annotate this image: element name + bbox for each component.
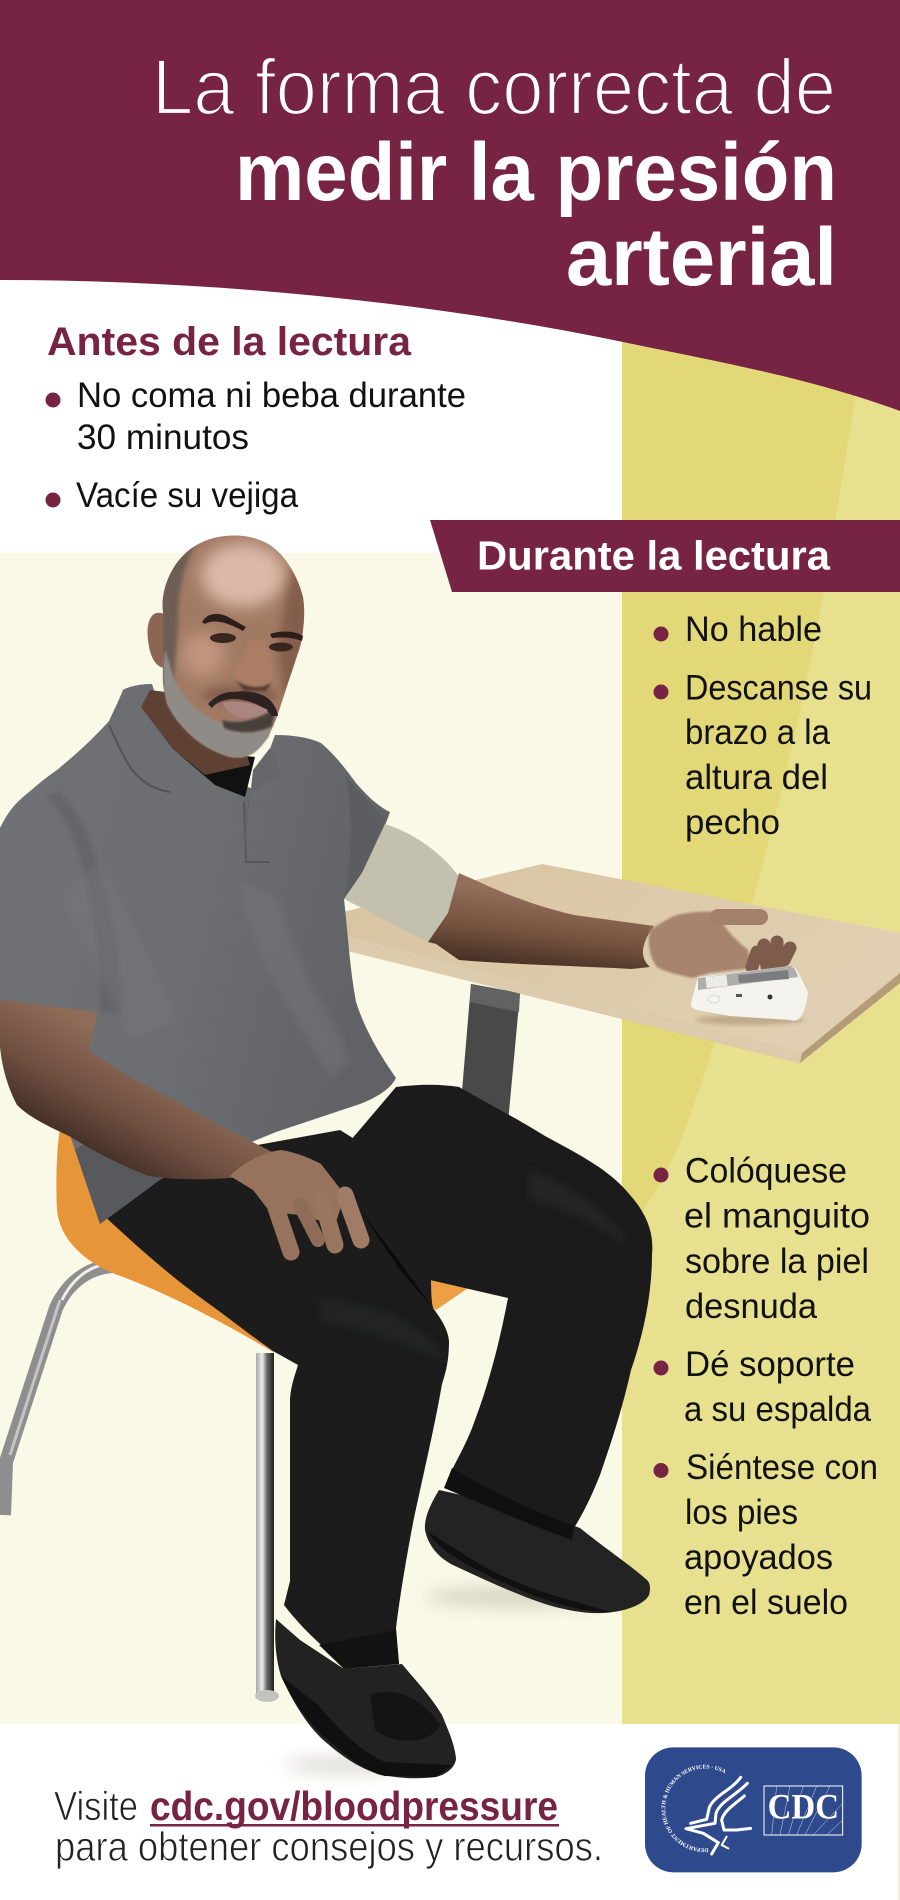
band: durante la lectura: Durante la lectura	[477, 532, 831, 578]
panel: durante la lectura list top: No hable	[685, 610, 822, 649]
monitor	[691, 966, 808, 1025]
panel: durante la lectura list top: brazo a la	[685, 713, 830, 752]
panel: durante la lectura list top: Descanse su	[685, 668, 872, 708]
skull and face	[163, 536, 304, 758]
head	[148, 536, 310, 758]
eyes	[210, 633, 236, 643]
shirt	[0, 684, 396, 1224]
panel: durante la lectura list top	[654, 610, 872, 842]
panel: antes de la lectura	[46, 320, 466, 515]
near arm	[0, 1000, 276, 1179]
undershirt	[172, 748, 255, 797]
footer call to action	[54, 1783, 603, 1870]
fingers	[752, 942, 790, 967]
table	[339, 864, 900, 1123]
beard	[163, 650, 277, 758]
panel: durante la lectura list bottom: Colóquese	[685, 1152, 847, 1190]
near leg and shoe	[100, 1130, 456, 1778]
eagle	[686, 1777, 751, 1854]
panel: durante la lectura list bottom: Siéntese con	[686, 1448, 878, 1487]
panel: durante la lectura list top: pecho	[685, 803, 780, 842]
panel: antes de la lectura: Antes de la lectura	[47, 320, 412, 364]
panel: durante la lectura list bottom: en el suelo	[684, 1583, 848, 1622]
logo: HHS and CDC	[645, 1747, 862, 1872]
thumb	[718, 909, 760, 925]
footer call to action: cdc.gov/bloodpressure	[150, 1783, 558, 1829]
panel: durante la lectura list bottom	[654, 1152, 878, 1622]
palm	[649, 912, 752, 978]
ear	[148, 613, 166, 668]
neck	[141, 690, 250, 775]
panel: durante la lectura list bottom: desnuda	[685, 1287, 818, 1326]
header band	[0, 0, 900, 411]
hand on knee	[230, 1150, 361, 1252]
panel: durante la lectura list bottom: los pies	[685, 1493, 798, 1532]
title: medir la presión	[235, 127, 837, 218]
panel: durante la lectura list bottom: a su espalda	[684, 1390, 872, 1429]
panel: antes de la lectura: No coma ni beba durante	[77, 376, 466, 415]
far arm and hand	[428, 873, 790, 978]
mustache	[208, 691, 278, 716]
chair back leg	[4, 1264, 112, 1515]
far leg and shoe	[300, 1085, 652, 1613]
collar	[109, 684, 241, 801]
panel: durante la lectura list bottom: sobre la piel	[685, 1242, 869, 1281]
footer call to action: Visite	[54, 1783, 138, 1829]
title	[152, 42, 837, 303]
seal text: DEPARTMENT OF HEALTH & HUMAN SERVICES · USA	[661, 1764, 725, 1852]
chair seat	[56, 1129, 290, 1352]
nose	[234, 640, 273, 687]
panel: durante la lectura list bottom: apoyados	[684, 1538, 833, 1577]
lips	[222, 701, 268, 718]
title: arterial	[566, 212, 837, 303]
man	[0, 536, 790, 1778]
cuff	[344, 824, 459, 942]
brows	[202, 614, 246, 631]
panel: durante la lectura list top: altura del	[685, 758, 828, 797]
panel: durante la lectura list bottom: el manguito	[684, 1196, 870, 1236]
chair	[4, 1129, 471, 1702]
panel: antes de la lectura: 30 minutos	[77, 418, 249, 457]
band: durante la lectura	[430, 520, 900, 592]
chair front leg	[255, 1353, 279, 1702]
panel: antes de la lectura: Vacíe su vejiga	[76, 476, 299, 515]
footer call to action: para obtener consejos y recursos.	[55, 1824, 603, 1870]
panel: durante la lectura list bottom: Dé soporte	[685, 1345, 855, 1384]
CDC mark: CDC	[768, 1787, 839, 1827]
title: La forma correcta de	[152, 42, 836, 131]
